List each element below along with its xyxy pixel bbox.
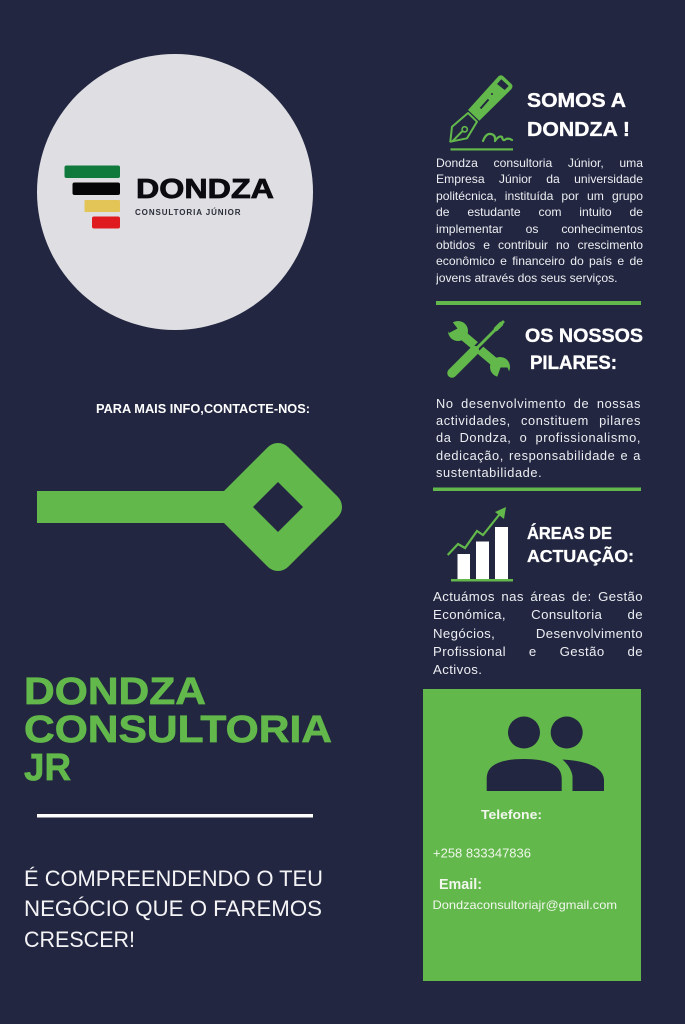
text block: somos a dondza: jovens através dos seus serviços. bbox=[436, 271, 618, 285]
text block: areas de actuacao: Profissional e Gestão de bbox=[433, 644, 643, 659]
contact prompt heading: PARA MAIS INFO,CONTACTE-NOS: bbox=[96, 402, 310, 416]
text block: areas de actuacao: Económica, Consultoria de bbox=[433, 607, 643, 622]
icon: growth bar chart bbox=[448, 507, 513, 582]
logo tagline: CONSULTORIA JÚNIOR bbox=[135, 208, 241, 217]
icon: logo stacked bars bbox=[64, 166, 120, 228]
text block: os nossos pilares: da Dondza, o profissionalismo, bbox=[436, 430, 641, 445]
logo wordmark: DONDZA bbox=[136, 173, 274, 204]
text block: os nossos pilares bbox=[436, 396, 641, 480]
icon: green key shape bbox=[37, 458, 328, 556]
icon: two people bbox=[487, 716, 604, 791]
heading: os nossos pilares: PILARES: bbox=[530, 353, 617, 374]
text block: areas de actuacao: Actuámos nas áreas de: Gestão bbox=[433, 589, 643, 604]
text block: areas de actuacao: Negócios, Desenvolvimento bbox=[433, 626, 643, 641]
panel: contact card bbox=[423, 689, 641, 981]
heading: somos a dondza bbox=[527, 90, 630, 141]
text block: somos a dondza bbox=[436, 156, 643, 285]
main title bbox=[24, 671, 332, 789]
text block: somos a dondza: obtidos e contribuir no crescimento bbox=[436, 238, 643, 252]
text block: somos a dondza: Dondza consultoria Júnior, uma bbox=[436, 156, 643, 170]
text block: somos a dondza: Empresa Júnior da universidade bbox=[436, 172, 643, 186]
slogan: CRESCER! bbox=[24, 927, 135, 952]
heading: areas de actuacao bbox=[527, 522, 634, 566]
text block: os nossos pilares: dedicação, responsabilidade e a bbox=[436, 448, 641, 463]
heading: areas de actuacao: ÁREAS DE bbox=[527, 522, 612, 543]
slogan: É COMPREENDENDO O TEU bbox=[24, 866, 323, 891]
email address: Dondzaconsultoriajr@gmail.com bbox=[432, 898, 617, 912]
text block: areas de actuacao bbox=[433, 589, 643, 677]
label: email: Email: bbox=[439, 877, 482, 893]
text block: os nossos pilares: actividades, constituem pilares bbox=[436, 413, 641, 428]
main title: DONDZA bbox=[24, 671, 206, 713]
text block: somos a dondza: de estudante com intuito de bbox=[436, 205, 643, 219]
heading: os nossos pilares bbox=[525, 326, 643, 374]
heading: somos a dondza: SOMOS A bbox=[527, 90, 626, 112]
text block: somos a dondza: politécnica, instituída por um grupo bbox=[436, 189, 643, 203]
text block: os nossos pilares: No desenvolvimento de nossas bbox=[436, 396, 641, 410]
text block: somos a dondza: implementar os conhecimentos bbox=[436, 222, 643, 236]
slogan: NEGÓCIO QUE O FAREMOS bbox=[24, 896, 322, 921]
main title: JR bbox=[24, 747, 71, 789]
slogan bbox=[24, 866, 323, 952]
heading: somos a dondza: DONDZA ! bbox=[527, 119, 630, 141]
text block: areas de actuacao: Activos. bbox=[433, 662, 482, 677]
label: telefone: Telefone: bbox=[481, 807, 542, 822]
phone number: +258 833347836 bbox=[433, 846, 531, 860]
main title: CONSULTORIA bbox=[24, 709, 332, 751]
logo panel: Dondza circle bbox=[37, 54, 313, 330]
heading: os nossos pilares: OS NOSSOS bbox=[525, 326, 643, 347]
icon: fountain pen bbox=[450, 75, 513, 150]
text block: os nossos pilares: sustentabilidade. bbox=[436, 465, 542, 480]
text block: somos a dondza: econômico e financeiro do país e de bbox=[436, 254, 643, 268]
heading: areas de actuacao: ACTUAÇÃO: bbox=[527, 545, 634, 566]
icon: crossed wrench and screwdriver bbox=[443, 320, 513, 381]
